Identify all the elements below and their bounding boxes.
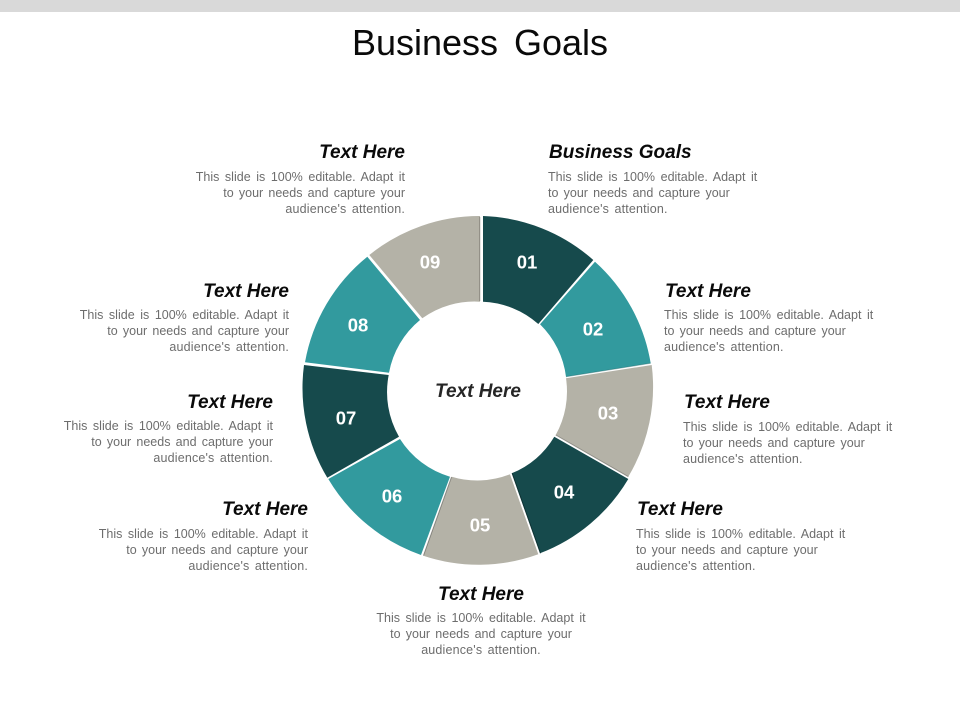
text block 06: This slide is 100% editable. Adapt it	[99, 527, 308, 541]
text block 07: to your needs and capture your	[91, 435, 273, 449]
segment 02	[540, 262, 651, 377]
segment 03: 03	[598, 402, 618, 424]
text block 04: to your needs and capture your	[636, 543, 818, 557]
segment 08	[305, 257, 420, 373]
text block 09: to your needs and capture your	[223, 186, 405, 200]
segment 05: 05	[470, 514, 490, 536]
segment 09: 09	[420, 252, 440, 272]
text block 01: business goals: Business Goals	[549, 142, 692, 162]
text block 07: Text Here	[187, 392, 273, 412]
text block 05: audience's attention.	[421, 643, 541, 657]
text block 08: Text Here	[203, 280, 289, 302]
segment 06: 06	[382, 486, 402, 506]
segment 08: 08	[348, 314, 368, 336]
text block 03: This slide is 100% editable. Adapt it	[683, 420, 892, 434]
text block 02: Text Here	[665, 280, 751, 302]
text block 01: business goals: This slide is 100% editable. Adapt it	[548, 170, 757, 184]
text block 03	[683, 392, 892, 466]
segment 05	[423, 474, 538, 565]
text block 06: Text Here	[222, 498, 308, 520]
title: Business Goals	[352, 22, 608, 63]
segment 07: 07	[336, 408, 356, 428]
segment 01	[483, 216, 593, 324]
text block 04: This slide is 100% editable. Adapt it	[636, 527, 845, 541]
text block 04: Text Here	[637, 498, 723, 520]
text block 06: audience's attention.	[188, 559, 308, 573]
text block 02: This slide is 100% editable. Adapt it	[664, 308, 873, 322]
segment 02: 02	[583, 318, 603, 340]
text block 05	[376, 584, 586, 657]
segment 04: 04	[554, 482, 575, 502]
text block 07	[64, 392, 273, 465]
text block 04	[636, 498, 846, 573]
segment 03	[556, 365, 653, 477]
text block 08: audience's attention.	[169, 340, 289, 354]
segment 07	[302, 365, 399, 478]
text block 07: audience's attention.	[153, 451, 273, 465]
text block 06	[99, 498, 308, 573]
text block 04: audience's attention.	[636, 559, 756, 573]
text block 05: to your needs and capture your	[390, 627, 572, 641]
center label: Text Here	[435, 381, 521, 402]
text block 08	[80, 280, 289, 354]
segment 09	[369, 216, 480, 318]
text block 05: Text Here	[438, 584, 524, 604]
text block 01: business goals: to your needs and capture your	[548, 186, 730, 200]
text block 03: audience's attention.	[683, 452, 803, 466]
segment 04	[512, 437, 628, 553]
top bar	[0, 0, 960, 12]
text block 09: Text Here	[319, 142, 405, 162]
text block 08: This slide is 100% editable. Adapt it	[80, 308, 289, 322]
text block 01: business goals: audience's attention.	[548, 202, 668, 216]
text block 09	[196, 142, 405, 216]
text block 01: business goals	[548, 142, 758, 216]
text block 02: to your needs and capture your	[664, 324, 846, 338]
text block 09: This slide is 100% editable. Adapt it	[196, 170, 405, 184]
segment 06	[328, 439, 450, 555]
text block 03: to your needs and capture your	[683, 436, 865, 450]
text block 08: to your needs and capture your	[107, 324, 289, 338]
text block 02: audience's attention.	[664, 340, 784, 354]
text block 02	[664, 280, 874, 354]
text block 07: This slide is 100% editable. Adapt it	[64, 419, 273, 433]
text block 06: to your needs and capture your	[126, 543, 308, 557]
text block 05: This slide is 100% editable. Adapt it	[376, 611, 586, 625]
text block 03: Text Here	[684, 392, 770, 412]
text block 09: audience's attention.	[285, 202, 405, 216]
segment 01: 01	[517, 252, 537, 272]
